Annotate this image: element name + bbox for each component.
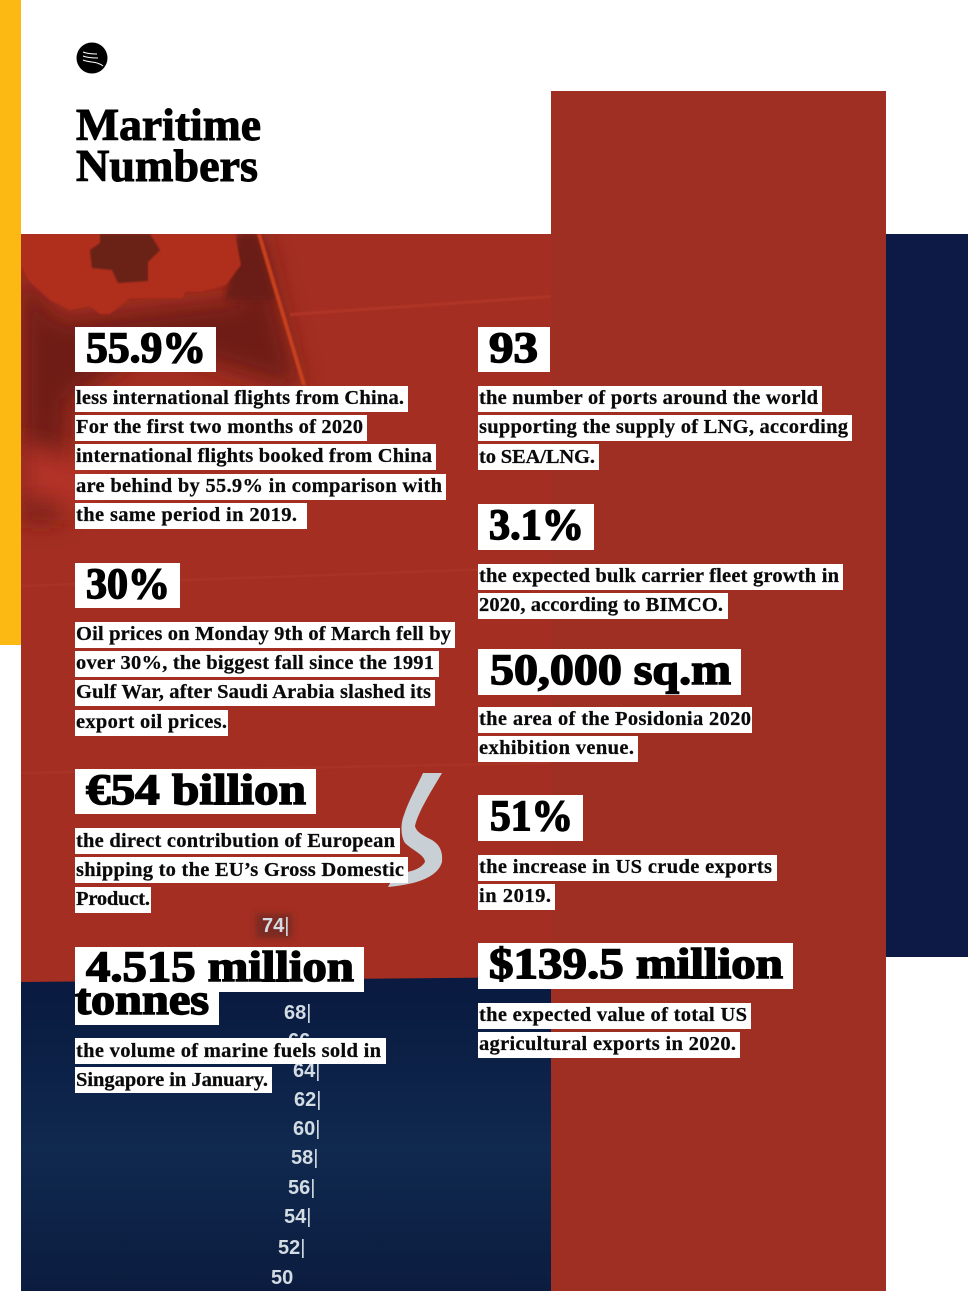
stat: €54 billion: €54 billion	[86, 767, 306, 814]
stat: €54 billion	[75, 767, 408, 913]
stat: 30%: Oil prices on Monday 9th of March fell by	[76, 623, 452, 645]
stat: 93: to SEA/LNG.	[479, 446, 595, 468]
hull draught marks: 62|	[294, 1089, 321, 1111]
stat: 30%: export oil prices.	[76, 711, 227, 733]
stat: 3.1%: 2020, according to BIMCO.	[479, 594, 723, 616]
stat: 50,000 sq.m: 50,000 sq.m	[490, 647, 731, 694]
stat: 93	[478, 325, 852, 470]
hull draught marks: 58|	[291, 1147, 318, 1169]
hull draught marks	[262, 915, 321, 1289]
stat: $139.5 million: agricultural exports in 2020.	[479, 1033, 736, 1055]
stat: 4.515 million tonnes: tonnes	[75, 977, 209, 1024]
hull draught marks: 60|	[293, 1118, 320, 1140]
hull draught marks: 52|	[278, 1237, 305, 1259]
hull draught marks: 66	[288, 1030, 310, 1052]
stat: €54 billion: the direct contribution of European	[76, 830, 396, 852]
stat: 51%: the increase in US crude exports	[479, 856, 772, 878]
navy right panel	[886, 234, 968, 957]
hull letter S	[388, 773, 442, 887]
stat: $139.5 million	[478, 941, 793, 1058]
stat: 55.9%: 55.9%	[86, 325, 206, 372]
stat: 4.515 million tonnes: 4.515 million	[86, 944, 354, 991]
hull draught marks: 54|	[284, 1206, 311, 1228]
stat: 51%	[478, 793, 777, 910]
stat: 55.9%: international flights booked from China	[76, 445, 432, 467]
title	[76, 100, 261, 191]
stat: 3.1%: 3.1%	[489, 502, 584, 549]
stat: $139.5 million: $139.5 million	[489, 941, 783, 988]
stat: 93: the number of ports around the world	[479, 387, 819, 409]
stat: 3.1%	[478, 502, 843, 619]
stat: 4.515 million tonnes: Singapore in January.	[76, 1069, 268, 1091]
stat: 55.9%: are behind by 55.9% in comparison with	[76, 475, 443, 497]
stat: 51%: 51%	[490, 793, 573, 840]
stat: €54 billion: Product.	[76, 888, 150, 910]
stat: 30%: over 30%, the biggest fall since the 1991	[76, 652, 434, 674]
stat: 93: supporting the supply of LNG, according	[479, 416, 849, 438]
hull draught marks: 64|	[293, 1060, 320, 1082]
stat: 51%: in 2019.	[479, 885, 551, 907]
stat: 30%: Gulf War, after Saudi Arabia slashed its	[76, 681, 431, 703]
stat: 55.9%: the same period in 2019.	[76, 504, 297, 526]
red right panel	[551, 91, 886, 1291]
stat: $139.5 million: the expected value of total US	[479, 1004, 747, 1026]
title: Maritime	[76, 100, 261, 150]
stat: €54 billion: shipping to the EU’s Gross Domestic	[76, 859, 404, 881]
stat: 55.9%	[75, 325, 446, 529]
title: Numbers	[76, 141, 258, 191]
hull draught marks: 56|	[288, 1177, 315, 1199]
stat: 55.9%: For the first two months of 2020	[76, 416, 363, 438]
stat: 30%: 30%	[86, 561, 170, 608]
photo: ship hull	[21, 234, 551, 1291]
stat: 4.515 million tonnes: the volume of marine fuels sold in	[76, 1040, 382, 1062]
stat: 4.515 million tonnes	[75, 944, 386, 1093]
stat: 50,000 sq.m	[478, 647, 752, 762]
stat: 93: 93	[489, 325, 538, 372]
stat: 30%	[75, 561, 455, 736]
yellow side bar	[0, 0, 21, 645]
hull draught marks: 50	[271, 1267, 293, 1289]
stat: 50,000 sq.m: the area of the Posidonia 2020	[479, 708, 751, 730]
icon: logo	[76, 42, 108, 74]
stat: 50,000 sq.m: exhibition venue.	[479, 737, 634, 759]
hull draught marks: 68|	[284, 1002, 311, 1024]
hull draught marks: 74|	[262, 915, 289, 937]
stat: 55.9%: less international flights from China.	[76, 387, 404, 409]
stat: 3.1%: the expected bulk carrier fleet growth in	[479, 565, 840, 587]
